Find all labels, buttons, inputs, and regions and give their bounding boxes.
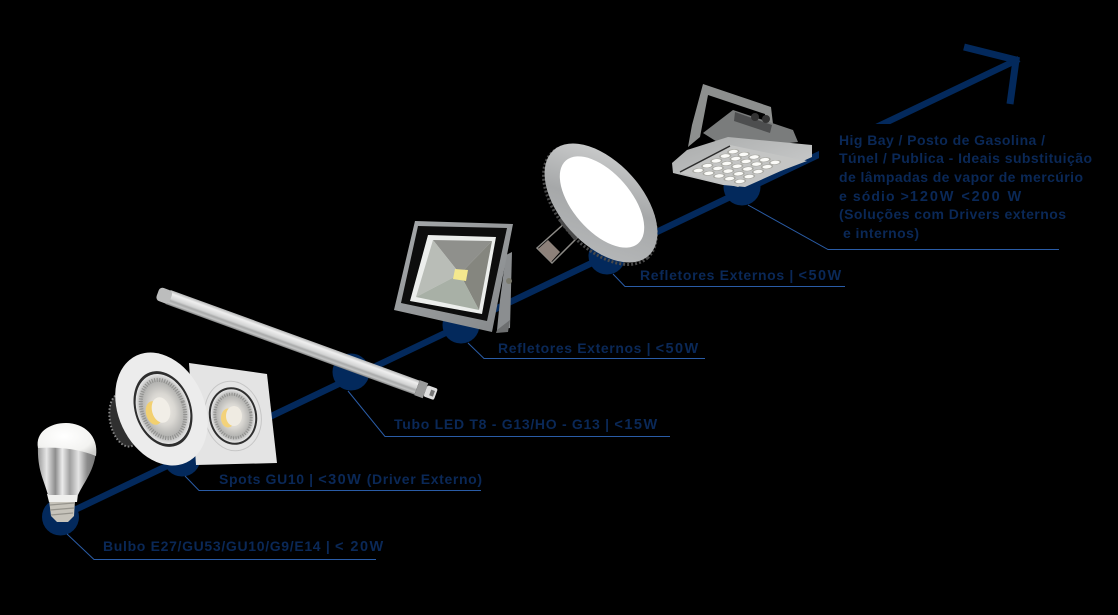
product: high bay luminaire (672, 84, 812, 187)
label: high bay description: e sódio >120W <200 W (839, 188, 1022, 205)
node: tube (332, 354, 370, 390)
node: panel (588, 238, 626, 274)
node: high bay (724, 168, 760, 206)
callout line: tube (348, 391, 670, 436)
label: tube: Tubo LED T8 - G13/HO - G13 | <15W (394, 416, 658, 433)
label: floodlight: Refletores Externos | <50W (498, 340, 699, 357)
product: square spot (189, 363, 277, 465)
label: high bay description: (Soluções com Drivers externos (839, 206, 1066, 222)
callout line: floodlight (468, 343, 705, 358)
product: round LED panel (522, 123, 679, 285)
label: bulb: Bulbo E27/GU53/GU10/G9/E14 | < 20W (103, 538, 384, 555)
callout line: high bay (748, 205, 1059, 250)
label: high bay description (839, 132, 1092, 241)
node: bulb (42, 498, 79, 536)
product: LED tube (155, 286, 439, 402)
product: bulb (38, 423, 96, 522)
node: floodlight (442, 306, 480, 344)
label: high bay description: Hig Bay / Posto de Gasolina / (839, 132, 1045, 148)
callout line: panel (613, 274, 845, 286)
node: spots (164, 440, 200, 476)
product: floodlight (394, 221, 513, 333)
label: high bay description: de lâmpadas de vapor de mercúrio (839, 169, 1083, 185)
label: panel: Refletores Externos | <50W (640, 267, 842, 284)
rising arrow timeline (60, 47, 1109, 517)
product: round spot (98, 337, 225, 481)
callout line: spots (185, 476, 481, 490)
callout line: bulb (67, 534, 376, 560)
label: high bay description: e internos) (843, 225, 919, 241)
label: spots: Spots GU10 | <30W (Driver Externo) (219, 471, 482, 488)
label: high bay description: Túnel / Publica - Ideais substituição (839, 150, 1092, 166)
